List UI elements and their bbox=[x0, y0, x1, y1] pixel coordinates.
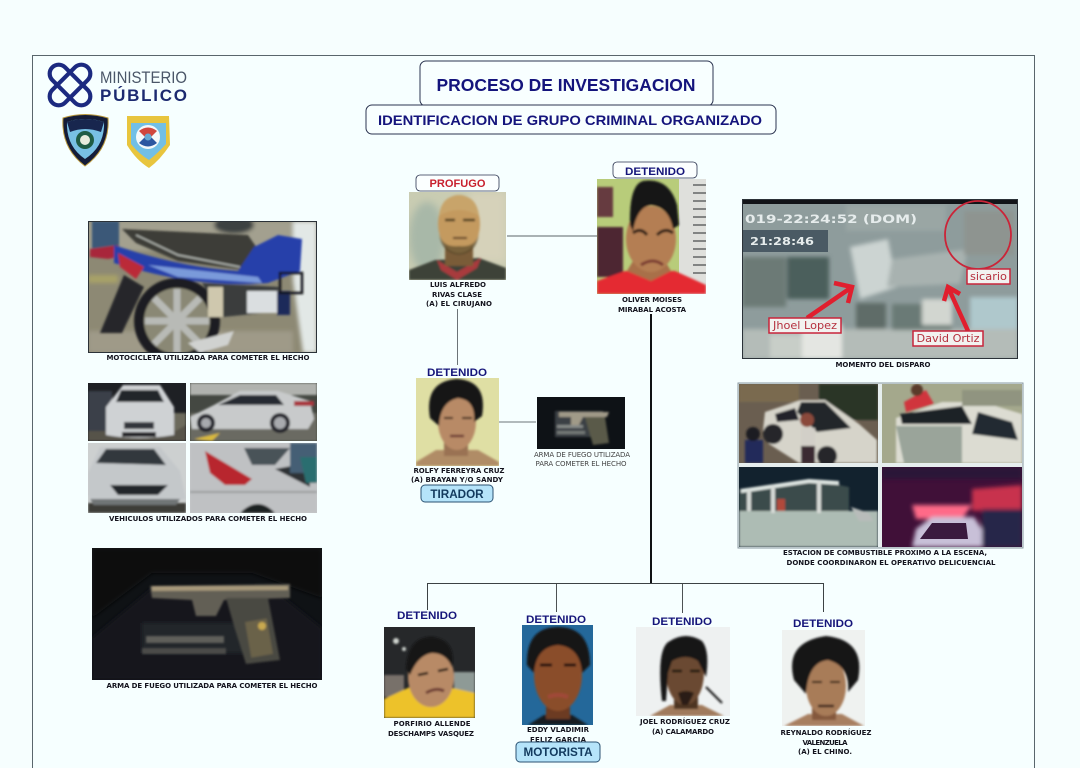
name: Luis Alfredo: (A) EL CIRUJANO bbox=[426, 300, 492, 308]
caption: firearm small: ARMA DE FUEGO UTILIZADA bbox=[534, 451, 630, 459]
annotation: label David Ortiz bbox=[913, 331, 983, 346]
name: Rolfy Ferreyra: ROLFY FERREYRA CRUZ bbox=[414, 467, 504, 475]
name: Reynaldo Rodriguez: REYNALDO RODRÍGUEZ bbox=[780, 728, 872, 737]
photo: open car door bbox=[882, 384, 1022, 463]
photo: CCTV shooting moment: 21:28:46 bbox=[750, 235, 814, 248]
name: Porfirio Allende bbox=[388, 720, 474, 738]
status label: detenido Reynaldo: DETENIDO bbox=[793, 618, 853, 630]
name: Reynaldo Rodriguez: (A) EL CHINO. bbox=[798, 748, 852, 756]
role badge: motorista bbox=[516, 742, 600, 762]
name: Luis Alfredo bbox=[426, 281, 492, 308]
photo: white car with man bbox=[739, 384, 878, 463]
photo: silver car side bbox=[190, 383, 317, 441]
photo: motorcycle bbox=[88, 221, 317, 353]
name: Oliver Moises bbox=[618, 296, 687, 314]
role badge: tirador bbox=[421, 485, 493, 502]
caption: vehicles: VEHICULOS UTILIZADOS PARA COMETER EL HECHO bbox=[109, 515, 307, 523]
photo: firearm small bbox=[537, 397, 625, 449]
photo: gas station night bbox=[739, 467, 878, 547]
role badge: tirador: TIRADOR bbox=[430, 488, 484, 501]
photo: Eddy Vladimir bbox=[522, 625, 593, 725]
name: Joel Rodriguez bbox=[639, 717, 730, 736]
name: Reynaldo Rodriguez: VALENZUELA bbox=[802, 739, 848, 747]
name: Luis Alfredo: LUIS ALFREDO bbox=[430, 281, 486, 289]
status label: detenido top bbox=[613, 162, 697, 178]
photo: silver car front bbox=[88, 383, 186, 441]
annotation: label sicario bbox=[967, 269, 1010, 284]
name: Porfirio Allende: DESCHAMPS VASQUEZ bbox=[388, 730, 474, 738]
name: Reynaldo Rodriguez bbox=[780, 728, 872, 756]
annotation: label sicario: sicario bbox=[970, 271, 1007, 283]
status label: detenido Eddy: DETENIDO bbox=[526, 614, 586, 626]
name: Rolfy Ferreyra bbox=[411, 467, 504, 484]
caption: gas station: ESTACION DE COMBUSTIBLE PROXIMO A LA ESCENA, bbox=[783, 549, 987, 557]
photo: Rolfy Ferreyra bbox=[416, 378, 499, 466]
caption: firearm: ARMA DE FUEGO UTILIZADA PARA COMETER EL HECHO bbox=[106, 682, 318, 690]
name: Oliver Moises: OLIVER MOISES bbox=[622, 296, 682, 304]
annotation: label David Ortiz: David Ortiz bbox=[916, 333, 980, 345]
status label: detenido Porfirio: DETENIDO bbox=[397, 610, 457, 622]
photo: Oliver Moises bbox=[597, 179, 706, 294]
photo grid: gas station scene bbox=[738, 383, 1023, 548]
photo: CCTV shooting moment bbox=[742, 199, 1018, 359]
photo grid: vehicles bbox=[88, 383, 317, 513]
connector lines bbox=[428, 236, 824, 613]
name: Oliver Moises: MIRABAL ACOSTA bbox=[618, 306, 687, 314]
logo: Ministerio Publico bbox=[46, 61, 187, 109]
logo wordmark top: MINISTERIO bbox=[100, 69, 187, 87]
name: Porfirio Allende: PORFIRIO ALLENDE bbox=[394, 720, 471, 728]
name: Joel Rodriguez: (A) CALAMARDO bbox=[652, 728, 714, 736]
photo: Luis Alfredo bbox=[409, 192, 506, 280]
photo: Joel Rodriguez bbox=[636, 627, 730, 716]
caption: motorcycle: MOTOCICLETA UTILIZADA PARA COMETER EL HECHO bbox=[106, 354, 310, 362]
name: Rolfy Ferreyra: (A) BRAYAN Y/O SANDY bbox=[411, 476, 504, 484]
name: Eddy Vladimir: EDDY VLADIMIR bbox=[527, 726, 590, 734]
photo: pink night scene bbox=[882, 467, 1022, 547]
logo wordmark bottom: PÚBLICO bbox=[100, 86, 187, 105]
status label: detenido Rolfy: DETENIDO bbox=[427, 367, 487, 379]
subtitle: IDENTIFICACION DE GRUPO CRIMINAL ORGANIZADO bbox=[378, 112, 762, 128]
role badge: motorista: MOTORISTA bbox=[523, 746, 593, 759]
name: Eddy Vladimir: FELIZ GARCIA bbox=[530, 736, 587, 744]
CCTV timestamps: 019-22:24:52 (DOM) bbox=[745, 212, 917, 226]
caption: firearm small bbox=[534, 451, 630, 468]
title box bbox=[420, 61, 713, 106]
caption: gas station bbox=[783, 549, 996, 567]
title: PROCESO DE INVESTIGACION bbox=[436, 75, 696, 95]
annotation: label Jhoel Lopez bbox=[769, 318, 841, 333]
photo: firearm bbox=[92, 548, 322, 680]
subtitle box bbox=[366, 105, 776, 134]
status label: profugo: PROFUGO bbox=[430, 178, 486, 190]
status label: detenido top: DETENIDO bbox=[625, 166, 685, 178]
name: Luis Alfredo: RIVAS CLASE bbox=[432, 291, 482, 299]
name: Eddy Vladimir bbox=[527, 726, 590, 744]
icon: knot emblem bbox=[46, 61, 94, 109]
icon: Policia Nacional shield bbox=[63, 114, 108, 166]
photo: Porfirio Allende bbox=[384, 627, 475, 718]
photo: silver car hood bbox=[88, 443, 186, 513]
annotation: suspect circle bbox=[945, 201, 1011, 269]
photo: Reynaldo Rodriguez bbox=[782, 630, 865, 726]
annotation: arrows bbox=[807, 283, 968, 331]
caption: moment of shot: MOMENTO DEL DISPARO bbox=[836, 361, 931, 369]
caption: firearm small: PARA COMETER EL HECHO bbox=[536, 460, 627, 468]
name: Joel Rodriguez: JOEL RODRÍGUEZ CRUZ bbox=[639, 717, 730, 726]
status label: profugo bbox=[416, 175, 499, 191]
status label: detenido Joel: DETENIDO bbox=[652, 616, 712, 628]
icon: DICRIM shield bbox=[127, 116, 170, 168]
annotation: label Jhoel Lopez: Jhoel Lopez bbox=[772, 320, 838, 332]
photo: silver car rear bbox=[190, 443, 317, 513]
caption: gas station: DONDE COORDINARON EL OPERATIVO DELICUENCIAL bbox=[786, 559, 996, 567]
